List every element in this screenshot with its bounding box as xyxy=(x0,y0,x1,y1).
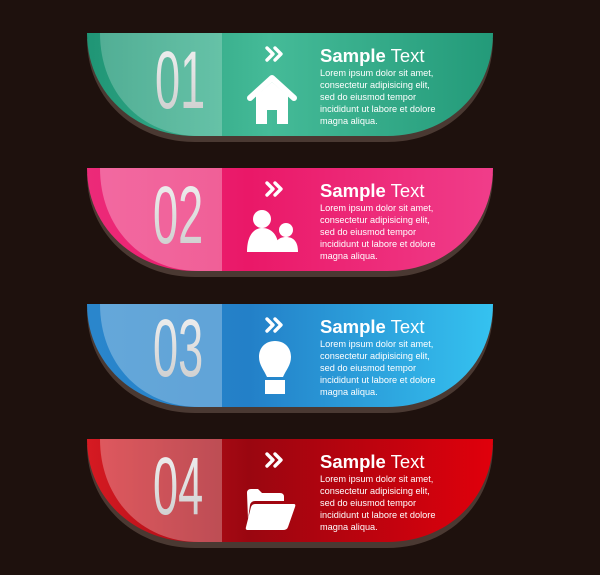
text block: Lorem ipsum dolor sit amet, xyxy=(320,68,433,78)
banner 3 xyxy=(87,303,493,413)
text block: incididunt ut labore et dolore xyxy=(320,510,435,520)
text block: incididunt ut labore et dolore xyxy=(320,375,435,385)
number 02: 02 xyxy=(153,170,203,262)
text block: magna aliqua. xyxy=(320,251,378,261)
icon: people xyxy=(247,210,298,252)
text block: sed do eiusmod tempor xyxy=(320,92,416,102)
icon: chevrons xyxy=(267,183,281,195)
text block: consectetur adipisicing elit, xyxy=(320,351,430,361)
number 03: 03 xyxy=(153,303,203,395)
text block: consectetur adipisicing elit, xyxy=(320,215,430,225)
number 01: 01 xyxy=(155,35,205,127)
text block xyxy=(320,180,435,261)
text block xyxy=(320,45,435,126)
text block: Sample Text xyxy=(320,451,425,472)
text block: Lorem ipsum dolor sit amet, xyxy=(320,203,433,213)
text block: consectetur adipisicing elit, xyxy=(320,80,430,90)
text block: sed do eiusmod tempor xyxy=(320,498,416,508)
text block: magna aliqua. xyxy=(320,116,378,126)
banner 2 xyxy=(87,168,493,277)
text block: sed do eiusmod tempor xyxy=(320,227,416,237)
number 04: 04 xyxy=(153,441,203,533)
text block xyxy=(320,451,435,532)
text block: Lorem ipsum dolor sit amet, xyxy=(320,474,433,484)
text block: sed do eiusmod tempor xyxy=(320,363,416,373)
text block: incididunt ut labore et dolore xyxy=(320,239,435,249)
text block xyxy=(320,316,435,397)
text block: consectetur adipisicing elit, xyxy=(320,486,430,496)
text block: magna aliqua. xyxy=(320,522,378,532)
icon: folder xyxy=(246,489,295,530)
banner 1 xyxy=(87,33,493,142)
text block: incididunt ut labore et dolore xyxy=(320,104,435,114)
text block: Lorem ipsum dolor sit amet, xyxy=(320,339,433,349)
text block: Sample Text xyxy=(320,316,425,337)
text block: Sample Text xyxy=(320,180,425,201)
icon: chevrons xyxy=(267,454,281,466)
text block: magna aliqua. xyxy=(320,387,378,397)
icon: chevrons xyxy=(267,48,281,60)
icon: light bulb xyxy=(267,319,281,331)
icon: house xyxy=(250,78,294,124)
banner 4 xyxy=(87,439,493,548)
text block: Sample Text xyxy=(320,45,425,66)
